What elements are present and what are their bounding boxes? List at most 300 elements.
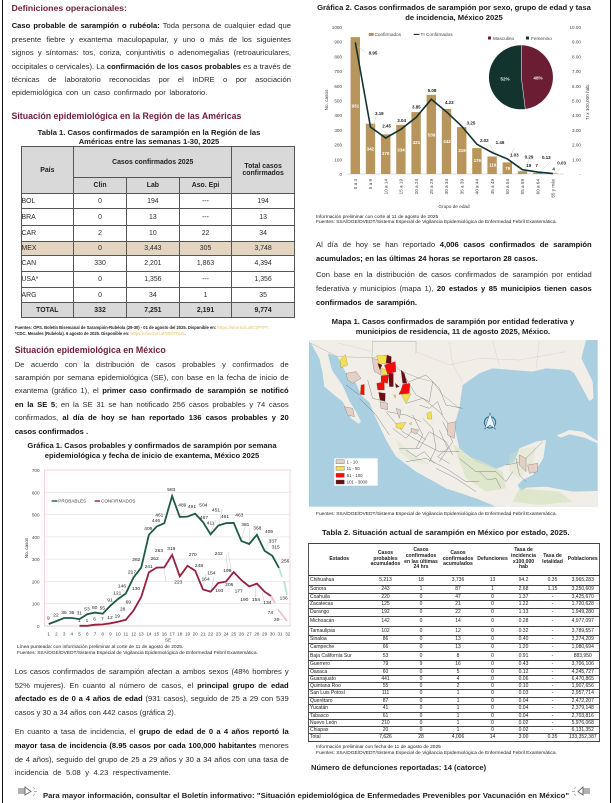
table 1: País xyxy=(40,166,54,174)
icon: left pointing hand xyxy=(18,786,37,796)
table 1: 0 xyxy=(98,245,102,252)
x axis labels: 45 a 49 xyxy=(490,179,495,194)
table 2: 0 xyxy=(491,720,494,726)
table 2 xyxy=(308,543,600,742)
data labels: 19 xyxy=(115,613,120,619)
table 2: 0 xyxy=(491,618,494,624)
table 2: 111 xyxy=(382,690,389,696)
table 2: 0.91 xyxy=(519,652,528,658)
table 1: BOL xyxy=(22,198,35,204)
chart 2: bars, line and pie xyxy=(324,25,590,209)
data labels: 91 xyxy=(107,597,113,603)
table 2: 0 xyxy=(420,698,422,704)
legend xyxy=(369,32,552,41)
table 1: 305 xyxy=(200,245,211,252)
rate labels: 8.95 xyxy=(369,50,378,55)
legend: Confirmados xyxy=(374,32,402,37)
table 1: --- xyxy=(202,276,209,283)
text block: distribución semana epidemiológica xyxy=(15,360,289,436)
x axis labels: 17 xyxy=(170,632,175,636)
text block: tasa de incidencia: En cuanto a tasa de incidencia, el grupo de edad de 0 a 4 años reportó la xyxy=(15,727,289,736)
table 1: 332 xyxy=(94,306,106,314)
table 2: 0 xyxy=(420,705,422,711)
data labels: 491 xyxy=(188,504,196,510)
table 2: - xyxy=(552,661,553,667)
land: Cuba and islands xyxy=(557,430,598,443)
table 2: - xyxy=(552,601,553,607)
text block: casos acumulados: acumulados; en las últimas 24 horas se reportaron 28 casos. xyxy=(316,254,538,263)
table 1 xyxy=(21,146,295,318)
data labels: 1 xyxy=(78,618,81,624)
table 2: Michoacán xyxy=(310,618,334,624)
chart 2 note: Fuentes: SSA/DGE/DVEDT/Sistema Especial de Vigilancia Epidemiológica de Enfermedad Febril Exantemática. xyxy=(316,220,557,225)
data labels: 223 xyxy=(174,579,183,585)
table 2: Oaxaca xyxy=(310,668,327,674)
bars xyxy=(351,37,558,174)
bar value labels: 442 xyxy=(443,139,451,144)
text block: sexos y grupos de edad: 52% mujeres). En cuanto al número de casos, el principal grupo de edad xyxy=(15,681,289,690)
left axis labels: 500 xyxy=(334,98,342,104)
legend xyxy=(52,499,135,504)
table 2: 20 xyxy=(383,726,388,732)
data labels: 164 xyxy=(202,576,210,582)
data labels: 242 xyxy=(215,551,223,557)
x axis labels: 3 xyxy=(63,632,66,636)
chart 2 note xyxy=(316,214,557,225)
table 2: Sonora xyxy=(310,586,326,592)
table 1: 0 xyxy=(98,214,102,220)
map of Mexico xyxy=(309,340,598,507)
table 1: 1,863 xyxy=(197,260,214,267)
x axis labels xyxy=(353,178,556,198)
x axis labels: 15 a 19 xyxy=(399,179,404,194)
data labels: 411 xyxy=(207,520,215,526)
table 2: Querétaro xyxy=(310,698,333,704)
data labels: 381 xyxy=(241,522,250,528)
table 2: - xyxy=(552,609,553,615)
table 2: 22 xyxy=(455,609,461,615)
table 2: Poblaciones xyxy=(568,556,598,562)
table 2: 1,949,280 xyxy=(572,609,594,615)
table 2: 0 xyxy=(420,668,422,674)
table 1: 2,191 xyxy=(197,306,214,314)
table 2: 41 xyxy=(383,705,388,711)
left axis labels: 100 xyxy=(334,157,342,162)
table 2: - xyxy=(552,705,553,711)
table 2: 1 xyxy=(457,720,459,726)
table 2: 0 xyxy=(491,712,494,718)
pie xyxy=(489,45,553,109)
table 1: --- xyxy=(202,214,209,220)
table 2: Estados xyxy=(329,556,349,562)
x axis labels: 21 xyxy=(200,632,206,636)
y axis title: No. casos xyxy=(24,537,29,558)
rate labels: 1.46 xyxy=(496,140,505,145)
left axis labels: 200 xyxy=(334,143,342,148)
table 2: 1.13 xyxy=(519,609,528,615)
data labels: 463 xyxy=(235,512,244,518)
table 1: 330 xyxy=(94,260,106,267)
table 2: Casos confirmados acumulados xyxy=(443,550,473,567)
data labels: 55 xyxy=(100,605,105,611)
table 2: 61 xyxy=(383,712,388,718)
table 2: 0 xyxy=(420,601,422,607)
table 1 title: Tabla 1. Casos confirmados de sarampión en la Región de las xyxy=(38,128,260,136)
table 2: 102 xyxy=(381,628,390,634)
x axis labels: 32 xyxy=(285,632,291,636)
table 2: 13 xyxy=(455,636,461,642)
map legend: 51 - 100 xyxy=(347,473,363,478)
text block: caso probable: signos y síntomas: tos, coriza, conjuntivitis o adenomegalias (retroauriculares, xyxy=(12,48,291,57)
left axis labels: 600 xyxy=(334,84,342,89)
rate labels xyxy=(369,50,567,171)
table 2 note: Información preliminar con fecha de 11 de agosto de 2025 xyxy=(316,745,441,750)
table 2: Chiapas xyxy=(310,726,328,732)
y axis labels: 700 xyxy=(32,468,40,473)
table 2: 55 xyxy=(383,682,388,688)
chart 1 title: Gráfica 1. Casos probables y confirmados de sarampión por semana xyxy=(27,441,277,450)
TI line xyxy=(355,42,553,174)
table 2: 1 xyxy=(420,586,422,592)
table 1: TOTAL xyxy=(36,306,58,314)
table 2: 0.43 xyxy=(519,661,528,667)
right axis labels: 5.00 xyxy=(572,98,581,104)
axis titles: No. casos xyxy=(324,89,329,110)
table 2: 3,706,106 xyxy=(572,661,594,667)
text block: casos acumulados xyxy=(316,240,592,263)
data labels xyxy=(47,487,290,624)
table 2: 3,250,609 xyxy=(572,586,594,592)
table 2: 28 xyxy=(418,734,424,740)
table 1 title: Américas entre las semanas 1-30, 2025 xyxy=(79,137,219,146)
table 2: 1,080,694 xyxy=(572,644,594,650)
left axis labels: 300 xyxy=(334,128,342,133)
municipalities 11-50 xyxy=(340,354,432,429)
x axis labels: 12 xyxy=(131,632,136,636)
x axis labels: 50 a 54 xyxy=(505,179,510,194)
x axis labels: 29 xyxy=(262,632,268,636)
compass xyxy=(484,413,496,429)
x axis labels: 18 xyxy=(177,632,183,636)
table 2: 14 xyxy=(490,734,495,740)
table 1: 4,394 xyxy=(254,260,272,267)
text block: distribución por entidad xyxy=(316,270,592,307)
table 2: Tamaulipas xyxy=(310,628,335,634)
rate labels: 0.03 xyxy=(557,160,567,165)
y axis labels: 200 xyxy=(32,579,40,584)
bar value labels: 319 xyxy=(458,148,466,153)
data labels: 7 xyxy=(101,616,104,622)
table 2: 0.04 xyxy=(519,712,528,718)
table 2: - xyxy=(552,726,553,732)
text block: caso probable: Caso probable de sarampión o rubéola: Toda persona de cualquier edad que xyxy=(12,21,291,30)
bar value labels: 342 xyxy=(367,146,375,151)
legend: PROBABLES xyxy=(58,499,86,504)
table 2: - xyxy=(552,628,553,634)
x axis labels: 24 xyxy=(223,632,229,636)
y axis labels xyxy=(32,468,40,629)
leader lines xyxy=(357,46,560,174)
bar value labels xyxy=(352,103,511,171)
text block: tasa de incidencia: incidencia de 5.08 y 4.23 respectivamente. xyxy=(15,768,171,777)
x axis labels: 30 xyxy=(270,632,275,636)
table 2: - xyxy=(552,652,553,658)
table 2: 14 xyxy=(455,618,461,624)
table 2: Coahuila xyxy=(310,594,330,600)
data labels: 489 xyxy=(178,502,187,508)
text block: sexos y grupos de edad: casos y 30 a 34 años con 442 casos (gráfica 2). xyxy=(15,708,176,717)
data labels: 262 xyxy=(151,556,159,562)
x axis labels: 13 xyxy=(139,632,144,636)
table 2: 0 xyxy=(491,644,494,650)
table 2: 1.22 xyxy=(519,601,528,607)
table 1 source note xyxy=(15,325,268,336)
table 2: 142 xyxy=(381,618,390,624)
table 2: 5,213 xyxy=(379,577,392,583)
table 2: 133,352,387 xyxy=(569,734,597,740)
table 2: - xyxy=(552,712,553,718)
table 2: 3.00 xyxy=(519,734,528,740)
x axis labels: 35 a 39 xyxy=(459,179,464,194)
table 2: 0 xyxy=(420,628,422,634)
table 2: Zacatecas xyxy=(310,601,333,607)
data labels: 121 xyxy=(113,590,122,596)
table 1: Aso. Epi xyxy=(192,182,219,189)
table 2: - xyxy=(552,636,553,642)
x axis labels: 27 xyxy=(247,632,252,636)
heading: definiciones operacionales: Definiciones operacionales: xyxy=(12,3,127,13)
map title: municipios de residencia, 11 de agosto 2025, México. xyxy=(356,327,550,336)
defunciones callout: Número de defunciones reportadas: 14 (catorce) xyxy=(311,763,486,772)
table 2: 0 xyxy=(420,652,422,658)
data labels: 6 xyxy=(93,616,96,622)
data labels: 31 xyxy=(77,610,82,616)
table 2: Guanajuato xyxy=(310,676,336,682)
table 2: 1.15 xyxy=(548,586,557,592)
table 2: 220 xyxy=(381,594,390,600)
table 2: 2,379,148 xyxy=(572,705,594,711)
data labels: 206 xyxy=(225,582,234,588)
table 2: 0.02 xyxy=(519,720,528,726)
x axis labels: 5 a 9 xyxy=(368,179,373,189)
table 2: 4,245,727 xyxy=(572,668,594,674)
table 1: confirmados xyxy=(242,170,284,177)
table 1: --- xyxy=(202,198,209,204)
data labels: 1 xyxy=(86,618,89,624)
data labels: 319 xyxy=(167,546,176,552)
table 1: 1,356 xyxy=(144,276,162,283)
x axis labels: 2 xyxy=(55,632,58,636)
right axis labels: 7.00 xyxy=(572,69,581,74)
right axis labels: 8.00 xyxy=(572,54,581,59)
text block: distribución por entidad: confirmados de sarampión. xyxy=(316,298,417,307)
map legend xyxy=(334,458,378,486)
roads and municipal lines xyxy=(346,375,543,492)
axis titles: Grupo de edad xyxy=(438,204,470,209)
x axis labels: 9 xyxy=(109,632,112,636)
text block: sexos y grupos de edad: afectado es de 0 a 4 años de edad (931 casos), seguido de 25 a 29 con 539 xyxy=(15,694,289,703)
text block: casos acumulados: Al día de hoy se han reportado 4,006 casos confirmados de sarampión xyxy=(316,240,592,249)
x axis labels: 16 xyxy=(162,632,167,636)
left axis labels: 700 xyxy=(334,69,342,74)
rate labels: 1.03 xyxy=(510,152,519,157)
table 2: 87 xyxy=(455,586,461,592)
data labels: 190 xyxy=(240,597,249,603)
table 2 note xyxy=(316,744,557,756)
municipalities 51-100 xyxy=(360,362,410,395)
table 2: Durango xyxy=(310,609,329,615)
text block: sexos y grupos de edad: Los casos confirmados de sarampión afectan a ambos sexos (48% hombres y xyxy=(15,667,289,676)
left axis labels: 0 xyxy=(339,172,342,177)
data labels: 337 xyxy=(269,538,277,544)
table 2: 2,472,207 xyxy=(572,698,594,704)
x axis labels: 40 a 44 xyxy=(475,179,480,194)
table 1: ARG xyxy=(22,292,36,298)
data labels: 36 xyxy=(61,610,67,616)
map title: Mapa 1. Casos confirmados de sarampión por entidad federativa y xyxy=(332,317,574,326)
text block: distribución por entidad: Con base en la distribución de casos confirmados de sarampión por entidad xyxy=(316,270,592,279)
y axis labels: 600 xyxy=(32,490,40,495)
table 2: 9 xyxy=(420,661,422,667)
data labels: 315 xyxy=(272,544,280,550)
data labels: 461 xyxy=(221,514,229,520)
text block: distribución semana epidemiológica: en la SE 5; en la SE 31 se han notificado 256 casos probables y 74 casos xyxy=(15,400,289,409)
US road lines xyxy=(339,342,566,382)
bar value labels: 334 xyxy=(397,147,405,152)
rate labels: 0.29 xyxy=(525,154,534,159)
table 2: 60 xyxy=(383,668,388,674)
table 2: 6,131,352 xyxy=(572,726,594,732)
table 2: 0.04 xyxy=(519,705,528,711)
table 2: 2,957,714 xyxy=(572,690,594,696)
table 1: MEX xyxy=(22,245,36,252)
x axis labels: 11 xyxy=(123,632,129,636)
table 2: 0 xyxy=(491,668,494,674)
rate labels: 5.08 xyxy=(428,88,437,93)
bar value labels: 539 xyxy=(428,132,436,137)
table 2: 1 xyxy=(491,586,494,592)
table 2: 0 xyxy=(491,682,494,688)
rate labels: 3.19 xyxy=(375,111,384,116)
table 1: 34 xyxy=(259,230,267,237)
x axis labels: 25 a 29 xyxy=(429,179,434,194)
table 2: 86 xyxy=(383,636,388,642)
table 2: 441 xyxy=(381,676,390,682)
table 2: 13 xyxy=(455,644,461,650)
x axis labels: 15 xyxy=(154,632,160,636)
icon: right pointing hand xyxy=(572,786,590,796)
table 2 title: Tabla 2. Situación actual de sarampión en México por estado, 2025. xyxy=(322,528,570,537)
x axis labels: 26 xyxy=(239,632,244,636)
rate labels: 19 xyxy=(526,163,532,168)
text block: tasa de incidencia xyxy=(15,727,289,777)
table 2: 4,977,097 xyxy=(572,618,594,624)
data labels: 270 xyxy=(189,552,197,558)
table 2: 2 xyxy=(457,682,459,688)
legend: Femenino xyxy=(531,36,552,41)
table 1: 194 xyxy=(257,198,269,204)
table 2: - xyxy=(552,668,553,674)
table 1 source note: Fuentes: OPS. Boletín Bisemanal de Sarampión-Rubéola (29-30) - 01 de agosto del 2025. Disponible en: https://shorturl.at/CSPTPT xyxy=(15,325,268,330)
table 2: 0 xyxy=(420,609,422,615)
table 2: Campeche xyxy=(310,644,334,650)
x axis labels: 7 xyxy=(94,632,97,636)
data labels: 22 xyxy=(53,612,59,618)
table 2: Chihuahua xyxy=(310,577,334,583)
table 2: 1 xyxy=(457,698,459,704)
data labels: 263 xyxy=(155,548,163,554)
x axis labels: 8 xyxy=(101,632,104,636)
right axis labels: 6.00 xyxy=(572,84,581,89)
data labels: 146 xyxy=(118,583,126,589)
x axis labels: 20 xyxy=(193,632,198,636)
map legend: 101 - 3000 xyxy=(347,480,368,485)
table 1: 10 xyxy=(149,230,157,237)
table 1: 0 xyxy=(98,292,102,298)
rate labels: 4.23 xyxy=(445,100,454,105)
axis titles: TI x 100,000 hab. xyxy=(585,84,590,120)
table 2: 0.40 xyxy=(519,636,528,642)
table 2: Baja California Sur xyxy=(310,652,352,658)
x axis labels: 5 xyxy=(78,632,81,636)
bar value labels: 270 xyxy=(382,151,390,156)
heading: situación en México: Situación epidemiológica en México xyxy=(15,345,166,355)
table 2: 0 xyxy=(491,601,494,607)
table 2: - xyxy=(552,644,553,650)
table 2: 0 xyxy=(420,644,422,650)
data labels: 467 xyxy=(200,515,208,521)
y axis labels: 400 xyxy=(32,535,40,540)
text block: tasa de incidencia: de 4 años), seguido del grupo de 25 a 29 años y 30 a 34 años con una tasa de xyxy=(15,755,289,764)
x axis labels: 23 xyxy=(216,632,221,636)
rate labels: 2.02 xyxy=(480,138,489,143)
chart 1: line chart xyxy=(24,468,291,642)
table 2: 13 xyxy=(490,577,495,583)
data labels: 199 xyxy=(223,568,232,574)
data labels: 12 xyxy=(107,615,113,621)
table 2: 8 xyxy=(457,652,459,658)
table 2: - xyxy=(552,594,553,600)
table 2: 2.68 xyxy=(519,586,528,592)
data labels: 583 xyxy=(167,487,176,493)
right axis labels: 4.00 xyxy=(572,113,581,118)
table 2: 87 xyxy=(383,698,388,704)
data labels: 217 xyxy=(128,569,136,575)
chart 1 title: epidemiológica y fecha de inicio de exantema, México 2025 xyxy=(45,451,259,460)
table 2: 3,965,283 xyxy=(572,577,594,583)
table 2: - xyxy=(552,618,553,624)
table 2: 1 xyxy=(457,712,459,718)
rate labels: 2.45 xyxy=(382,123,392,128)
right axis labels: 1.00 xyxy=(572,157,581,162)
x axis labels: 60 a 64 xyxy=(535,179,540,194)
US/Mexico border and north area xyxy=(311,342,459,408)
table 2: 0 xyxy=(491,698,494,704)
table 2: Tabasco xyxy=(310,712,329,718)
x axis labels: 14 xyxy=(146,632,152,636)
table 2: Guerrero xyxy=(310,661,330,667)
x axis labels: 4 xyxy=(71,632,74,636)
table 2: 4,006 xyxy=(452,734,464,740)
table 1: USA* xyxy=(22,276,38,283)
table 2: 66 xyxy=(383,644,388,650)
table 2: 1,907,656 xyxy=(572,682,594,688)
data labels: 409 xyxy=(265,529,273,535)
table 2: 18 xyxy=(418,577,424,583)
bar value labels: 119 xyxy=(489,162,497,167)
table 2 note: Fuentes: SSA/DGE/DVEDT/Sistema Especial de Vigilancia Epidemiológica de Enfermedad Febril Exantemática. xyxy=(316,751,557,756)
table 1: 194 xyxy=(147,198,159,204)
